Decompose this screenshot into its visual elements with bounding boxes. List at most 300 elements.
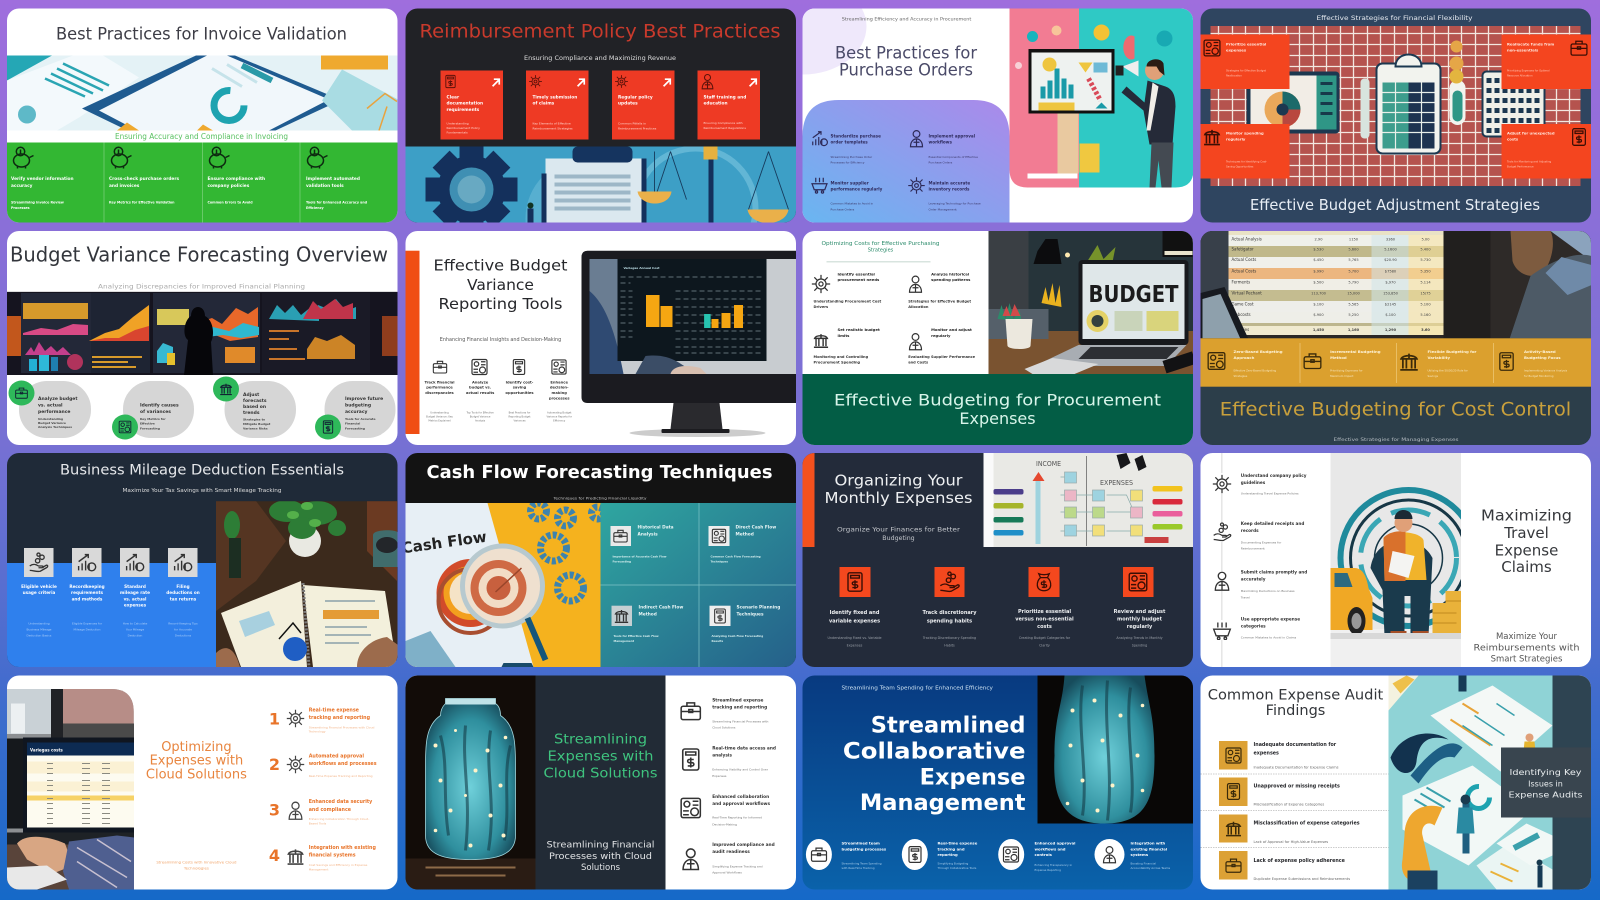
illustration: budget table and analyst: 1,450	[1313, 328, 1325, 332]
card: clear documentation: Reimbursement Policy	[446, 126, 480, 130]
bubble: improve future budgeting: Improve future	[345, 396, 383, 402]
step: identify fixed	[827, 567, 882, 647]
illustration: budget table and analyst: 5.160	[1420, 313, 1431, 317]
item: understand policy: Understand company policy	[1241, 473, 1307, 478]
step: review and adjust: regularly	[1127, 624, 1153, 630]
illustration: budget table and analyst: 15,000	[1347, 292, 1360, 296]
bubble: analyze budget: performance	[38, 409, 70, 415]
bubble: identify causes: Forecasting	[140, 426, 160, 430]
method: activity-based: for Budget Monitoring	[1524, 374, 1554, 378]
item: real-time data: analysis	[712, 753, 732, 759]
finding: inadequate documentation: expenses	[1254, 752, 1279, 756]
item: expense tracking: Real-time expense	[938, 840, 978, 846]
card: clear documentation	[440, 70, 503, 140]
step: review and adjust: monthly budget	[1117, 617, 1163, 623]
step: prioritize essential	[1015, 567, 1074, 647]
step 1: Technology	[308, 730, 326, 734]
item: implement tools: Implement automated	[306, 176, 360, 182]
box: prioritize essential expenses: Strategies for Effective Budget	[1226, 68, 1266, 72]
step 4: Integration with existing	[309, 845, 376, 851]
box: monitor spending: Saving Opportunities	[1226, 164, 1254, 168]
callout: Expense Audits	[1508, 790, 1582, 800]
card: regular policy updates: Common Pitfalls in	[618, 122, 646, 126]
illustration: jar photo	[1038, 676, 1193, 824]
item: understand policy	[1212, 473, 1307, 496]
illustration: budget table and analyst: 2.90	[1314, 238, 1323, 242]
item: approval workflows: controls	[1034, 852, 1053, 857]
step 2	[269, 754, 377, 778]
item: approval workflows: workflows and	[1034, 846, 1066, 852]
technique: direct: Common Cash Flow Forecasting	[710, 554, 761, 558]
item: analyze historical: Strategies for Effective Budget	[908, 300, 971, 304]
subtitle: Processes with Cloud	[549, 852, 652, 862]
title: Maximizing	[1481, 507, 1572, 525]
subtitle: Budgeting	[882, 535, 915, 542]
item: identify procurement needs	[812, 272, 882, 309]
item: real-time data: Enhancing Visibility and Control Over	[712, 768, 769, 772]
accent bar	[802, 453, 814, 547]
step 1	[269, 708, 375, 734]
item: filing deductions: for Accurate	[174, 627, 192, 631]
box: adjust for unexpected costs: costs	[1507, 136, 1519, 142]
title: Streamlined	[871, 712, 1026, 738]
item: maintain inventory: inventory records	[928, 186, 970, 192]
bubble: adjust forecasts: forecasts	[243, 398, 267, 404]
panel: Effective Budget Variance Reporting Tools	[406, 231, 796, 445]
item: recordkeeping: and methods	[72, 596, 103, 601]
item: standard mileage: How to Calculate	[123, 622, 147, 626]
title: Organizing Your	[834, 472, 963, 490]
illustration: traveller with car and gauge	[1330, 453, 1461, 667]
panel: Budget Variance Forecasting Overview	[7, 231, 398, 445]
title: Expense	[1495, 541, 1558, 559]
illustration: budget table and analyst: Webcosts	[1232, 312, 1251, 317]
item: collaboration: Decision-Making	[712, 822, 737, 826]
title: Best Practices for	[835, 44, 977, 62]
method: flexible	[1400, 349, 1476, 378]
box: adjust for unexpected costs: Adjust for unexpected	[1507, 130, 1555, 136]
method: incremental: Maximum Impact	[1330, 374, 1354, 378]
green title band: Effective Budgeting for Procurement	[834, 391, 1161, 410]
item: team budgeting: budgeting processes	[842, 846, 887, 852]
subtitle: Enhancing Financial Insights and Decision-Making	[440, 337, 561, 343]
subtitle: Maximize Your Tax Savings with Smart Mileage Tracking	[122, 488, 282, 494]
item: analyze budget	[466, 360, 495, 423]
item: maintain inventory: Maintain accurate	[928, 180, 970, 186]
item: team budgeting	[806, 839, 887, 870]
method: incremental: Method	[1330, 355, 1347, 360]
finding: inadequate documentation: Inadequate documentation for	[1254, 742, 1337, 748]
item: implement approval: Implement approval	[928, 134, 976, 138]
item: enhance decision-making	[546, 360, 573, 423]
step 3: Based Tools	[309, 822, 327, 826]
technique: indirect: Method	[638, 611, 657, 617]
illustration: budget table and analyst: $.990	[1313, 270, 1324, 274]
title: Optimizing	[161, 740, 232, 755]
step: review and adjust: Review and adjust	[1114, 609, 1166, 615]
step: prioritize essential: Clarity	[1039, 643, 1050, 647]
illustration: budget table and analyst: $20.90	[1384, 258, 1397, 262]
panel: Effective Budget Adjustment Strategies	[1200, 8, 1592, 222]
bubble: adjust forecasts	[213, 376, 296, 438]
step: review and adjust: Analyzing Trends in Monthly	[1116, 636, 1163, 640]
bubble: adjust forecasts: Strategies to	[243, 418, 265, 422]
box: monitor spending: regularly	[1226, 136, 1246, 142]
item: financial systems: systems	[1130, 852, 1149, 857]
item: standard mileage: vs. actual	[124, 596, 147, 601]
title: Management	[860, 790, 1026, 816]
method: zero-based	[1208, 349, 1283, 378]
illustration: budget table and analyst: 1150	[1349, 238, 1359, 242]
illustration: budget table and analyst: $2145	[1385, 302, 1396, 306]
bubble: improve future budgeting: Forecasting	[345, 426, 365, 430]
item: expense tracking	[681, 698, 769, 730]
step 3: 3	[269, 800, 280, 820]
item: appropriate categories: Use appropriate expense	[1241, 616, 1300, 621]
illustration: whiteboard income and expenses	[984, 453, 1193, 547]
box: prioritize essential expenses: Reallocation	[1226, 74, 1242, 78]
illustration: analyst viewing dashboards	[7, 292, 398, 375]
subtitle: Maximize Your	[1496, 632, 1558, 642]
item: track financial: Track financial	[424, 381, 455, 385]
item: enhance decision-making: Enhance	[550, 381, 568, 385]
bubble: identify causes: Key Metrics for	[140, 417, 166, 421]
item: cross-check: Key Metrics for Effective Validation	[109, 200, 175, 204]
step 1: 1	[269, 710, 280, 728]
title: Claims	[1501, 558, 1552, 576]
item: submit claims: accurately	[1241, 577, 1266, 582]
item: filing deductions: Record-Keeping Tips	[168, 622, 198, 626]
card: staff training: Staff training and	[704, 94, 746, 100]
title: Expense	[920, 764, 1026, 790]
box: adjust for unexpected costs: Budget Performance	[1507, 164, 1534, 168]
item: track financial: Metrics Explained	[428, 419, 451, 423]
item: recordkeeping: requirements	[71, 590, 103, 595]
technique: historical: Forecasting	[612, 559, 631, 563]
step: identify fixed: Identify fixed and	[830, 610, 880, 616]
item: real-time data: Real-time data access and	[712, 746, 776, 752]
item: expense tracking: Through Collaborative Tools	[936, 866, 977, 870]
top caption: Streamlining Team Spending for Enhanced Efficiency	[842, 685, 993, 691]
finding: inadequate documentation: Inadequate Documentation for Expense Claims	[1254, 766, 1339, 770]
item: standardize: Streamlining Purchase Order	[830, 155, 873, 159]
item: team budgeting: Streamlined team	[842, 840, 880, 846]
item: compliance	[683, 842, 775, 874]
illustration: budget table and analyst: 5,1600	[1384, 248, 1397, 252]
caption: Optimizing Costs for Effective Purchasing	[822, 241, 940, 247]
card: regular policy updates: Reimbursement Practices	[618, 126, 657, 130]
panel: Optimizing Expenses with Cloud Solutions	[7, 676, 398, 890]
illustration: audit documents	[1388, 676, 1552, 890]
item: monitor and adjust: Evaluating Supplier Performance	[908, 355, 976, 359]
item: compliance: Approval Workflows	[712, 870, 742, 874]
step: identify fixed: variable expenses	[829, 618, 880, 624]
item: ensure compliance: company policies	[208, 183, 250, 189]
method: flexible: Flexible Budgeting for	[1428, 349, 1476, 354]
item: monitor supplier: Monitor supplier	[830, 180, 869, 186]
item: enhance decision-making: processes	[549, 396, 570, 400]
method: activity-based: Implementing Variance Analysis	[1524, 369, 1568, 373]
step 1: Streamlining Financial Processes with Cloud	[309, 726, 375, 730]
title: Streamlining	[554, 732, 647, 748]
item: submit claims: Travel	[1240, 595, 1250, 599]
item: maintain inventory: Leveraging Technology for Purchase	[928, 202, 981, 206]
technique: scenario: Techniques	[736, 611, 764, 617]
illustration: budget table and analyst: 5,790	[1348, 280, 1359, 284]
technique: direct: Method	[736, 532, 754, 538]
finding: unapproved receipts: Misclassification of Expense Categories	[1254, 802, 1324, 806]
title: Cloud Solutions	[146, 768, 247, 782]
illustration: budget grid, clipboard and charts	[1210, 26, 1580, 186]
illustration: budget table and analyst: 5.350	[1420, 270, 1431, 274]
title: Monthly Expenses	[824, 489, 972, 507]
item: standardize: Processes for Efficiency	[830, 160, 865, 164]
title: Variance	[467, 276, 534, 294]
item: financial systems: Integration with	[1130, 840, 1166, 846]
top caption: Streamlining Efficiency and Accuracy in Procurement	[842, 16, 971, 22]
method: flexible: Savings	[1428, 374, 1439, 378]
item: standard mileage: Deduction	[128, 633, 143, 637]
technique: direct: Direct Cash Flow	[736, 525, 776, 531]
box: reallocate funds: Resource Allocation	[1507, 74, 1533, 78]
bubble: adjust forecasts: Adjust	[243, 392, 260, 398]
item: identify procurement needs: Understanding Procurement Cost	[814, 300, 882, 304]
item: recordkeeping	[69, 548, 105, 631]
illustration: budget table and analyst: 5.100	[1420, 302, 1431, 306]
item: keep receipts: records	[1241, 528, 1259, 533]
teal technique panels	[600, 503, 796, 667]
item: verify vendor: Processes	[11, 206, 30, 210]
green title band: Expenses	[959, 409, 1036, 428]
technique: direct	[708, 525, 776, 563]
step: track discretionary	[922, 567, 977, 647]
step 3: Enhanced data security	[309, 799, 373, 805]
bubble: identify causes: Identify causes	[140, 403, 179, 409]
item: monitor supplier	[812, 178, 883, 212]
step: track discretionary: spending habits	[927, 618, 972, 624]
item: identify cost-saving: Reporting Budget	[509, 415, 530, 419]
title: Best Practices for Invoice Validation	[56, 24, 347, 44]
method: zero-based: Strategies	[1234, 374, 1248, 378]
illustration: budget table and analyst: Totalities	[1230, 327, 1249, 332]
bubble: improve future budgeting: budgeting	[345, 403, 371, 409]
illustration: budget table and analyst: $7580	[1385, 270, 1397, 274]
box: monitor spending: Monitor spending	[1226, 130, 1264, 136]
technique: scenario	[710, 604, 780, 643]
illustration: budget table and analyst: $.100	[1385, 313, 1396, 317]
item: monitor and adjust: regularly	[931, 333, 951, 338]
bubble: analyze budget: vs. actual	[38, 403, 63, 409]
step 1: Real-time expense	[309, 708, 360, 714]
bubble: adjust forecasts: Variance Risks	[243, 426, 268, 430]
step 1: tracking and reporting	[309, 715, 371, 721]
callout: Issues in	[1528, 780, 1563, 788]
item: identify cost-saving	[505, 360, 534, 423]
illustration: budget table and analyst: 5,250	[1348, 313, 1359, 317]
illustration: tablet with invoice	[7, 56, 398, 130]
title: Cloud Solutions	[544, 766, 658, 782]
item: real-time data: Expenses	[712, 774, 727, 778]
finding: unapproved receipts: Unapproved or missing receipts	[1254, 784, 1340, 790]
step: track discretionary: Tracking Discretionary Spending	[922, 636, 976, 640]
step 2: Automated approval	[309, 754, 364, 760]
card: staff training	[698, 70, 760, 140]
item: recordkeeping: Mileage Deduction	[74, 627, 101, 631]
item: standard mileage	[120, 548, 150, 637]
item: implement tools: Tools for Enhanced Accuracy and	[306, 200, 368, 204]
step 2: workflows and processes	[309, 761, 377, 767]
right slate strip	[1552, 676, 1592, 890]
illustration: budget table and analyst: 5,765	[1348, 258, 1359, 262]
technique: indirect: Indirect Cash Flow	[638, 604, 683, 610]
item: set realistic limits: Procurement Spending	[814, 361, 861, 365]
method: flexible: Variability	[1428, 355, 1450, 360]
item: standardize	[813, 132, 881, 164]
callout: Identifying Key	[1510, 768, 1582, 777]
caption: Effective Strategies for Managing Expenses	[1334, 437, 1459, 443]
item: analyze historical	[908, 272, 971, 309]
item: keep receipts: Keep detailed receipts and	[1241, 521, 1304, 526]
illustration: desk with plant and notebook	[216, 501, 398, 667]
item: implement tools: validation tools	[306, 183, 344, 189]
gold band with methods	[1200, 338, 1592, 387]
item: submit claims: Maximizing Deductions on Business	[1241, 589, 1295, 593]
step 4: Management	[309, 868, 329, 872]
illustration: budget table and analyst: $,970	[1385, 280, 1396, 284]
item: eligible vehicle: Understanding	[28, 622, 50, 626]
illustration: glowing glass jar	[406, 676, 536, 890]
step: review and adjust	[1114, 567, 1166, 647]
panel: Streamlining Expenses with Cloud Solutions	[406, 676, 796, 890]
item: eligible vehicle	[21, 548, 57, 637]
finding: misclassification: Lack of Approval for High-Value Expenses	[1254, 840, 1328, 844]
item: standardize: order templates	[830, 140, 868, 144]
title: Expenses with	[150, 754, 243, 768]
item: filing deductions: Deductions	[175, 633, 192, 637]
finding: inadequate documentation	[1219, 741, 1339, 770]
box: prioritize essential expenses: expenses	[1226, 48, 1247, 52]
item: expense tracking	[902, 839, 978, 870]
subtitle: Smart Strategies	[1491, 655, 1563, 665]
item: implement tools	[306, 147, 368, 210]
item: track financial: discrepancies	[425, 391, 455, 395]
item: collaboration: and approval workflows	[712, 801, 771, 807]
item: analyze budget: Analysis	[475, 419, 486, 423]
illustration: budget table and analyst: 113,700	[1311, 292, 1327, 296]
item: standardize: Standardize purchase	[830, 134, 881, 138]
technique: historical: Historical Data	[638, 525, 674, 531]
illustration: budget table and analyst: 3360	[1386, 238, 1396, 242]
card: regular policy updates: Regular policy	[618, 94, 653, 100]
item: verify vendor: accuracy	[11, 183, 33, 189]
item: implement approval	[910, 131, 978, 164]
item: expense tracking: tracking and reporting	[712, 705, 767, 711]
bubble: identify causes	[112, 381, 194, 440]
step: track discretionary: Track discretionary	[922, 610, 977, 616]
panel: Best Practices for Invoice Validation	[7, 8, 398, 222]
item: compliance: Simplifying Expense Tracking and	[712, 864, 763, 868]
item: implement approval: Purchase Orders	[928, 160, 953, 164]
item: set realistic limits: limits	[838, 333, 850, 338]
card: clear documentation: Understanding	[446, 122, 469, 126]
item: collaboration	[681, 794, 771, 826]
item: recordkeeping: Recordkeeping	[69, 584, 105, 589]
illustration: person at spreadsheet monitor: Variegas costs	[30, 748, 63, 752]
method: activity-based: Activity-Based	[1524, 349, 1556, 354]
step: prioritize essential: costs	[1037, 624, 1052, 630]
illustration: budget table and analyst: $.530	[1313, 248, 1324, 252]
method: zero-based: Effective Zero-Based Budgeting	[1234, 369, 1276, 373]
bubble: analyze budget: Budget Variance	[38, 421, 66, 425]
item: analyze budget: Top Tools for Effective	[467, 411, 494, 415]
method: incremental: Incremental Budgeting	[1330, 349, 1381, 354]
item: approval workflows: Expense Reporting	[1034, 868, 1061, 872]
technique: scenario: Scenario Planning	[736, 604, 780, 610]
illustration: presenter with chart	[1010, 8, 1194, 188]
illustration: cash flow target and gears: Cash Flow	[401, 528, 488, 557]
item: expense tracking: Simplifying Budgeting	[938, 862, 969, 866]
item: financial systems	[1094, 839, 1171, 870]
finding: unapproved receipts	[1219, 778, 1340, 806]
card: regular policy updates: updates	[618, 100, 638, 106]
box: reallocate funds: Reallocate funds from	[1507, 42, 1554, 46]
illustration: budget table and analyst: 5,565	[1348, 302, 1359, 306]
item: team budgeting: Streamlining Team Spending	[842, 862, 882, 866]
subtitle: Technologies	[183, 866, 209, 870]
box: reallocate funds: non-essentials	[1507, 48, 1539, 52]
item: enhance decision-making: Variance Reports for	[546, 415, 573, 419]
item: identify procurement needs: Drivers	[814, 305, 828, 309]
item: implement approval: Essential Components of Effective	[928, 155, 978, 159]
bubble: improve future budgeting	[315, 381, 396, 440]
item: standard mileage: Standard	[124, 584, 146, 589]
finding: policy adherence: Lack of expense policy adherence	[1254, 858, 1346, 864]
card: staff training: Reimbursement Regulations	[704, 126, 746, 130]
item: ensure compliance: Common Errors to Avoid	[208, 200, 253, 204]
panel: Effective Budgeting for Procurement Expenses	[802, 231, 1196, 445]
card: timely submission: Key Elements of Effective	[532, 122, 571, 126]
subtitle: Techniques for Predicting Financial Liquidity	[552, 497, 646, 501]
green panel	[7, 142, 398, 222]
card: clear documentation: Fundamentals	[446, 130, 468, 134]
item: analyze budget: budget vs.	[469, 386, 492, 390]
item: expense tracking: reporting	[938, 852, 958, 857]
title: Business Mileage Deduction Essentials	[60, 463, 344, 479]
item: eligible vehicle: usage criteria	[23, 590, 56, 595]
box: prioritize essential expenses: Prioritize essential	[1226, 42, 1266, 46]
item: team budgeting: with Real-Time Tracking	[842, 866, 875, 870]
subtitle: Streamlining Costs with Innovative Cloud	[156, 860, 237, 864]
item: monitor supplier: performance regularly	[830, 186, 883, 192]
item: analyze budget: actual results	[466, 391, 495, 395]
finding: policy adherence	[1219, 851, 1350, 881]
item: ensure compliance: Ensure compliance with	[208, 176, 265, 182]
method: zero-based: Approach	[1234, 355, 1255, 360]
panel: Common Expense Audit Findings	[1200, 676, 1592, 890]
gradient panel	[802, 100, 1010, 222]
subtitle: Ensuring Accuracy and Compliance in Invoicing	[115, 132, 288, 141]
card: staff training: Ensuring Compliance with	[704, 121, 743, 125]
illustration: whiteboard income and expenses: INCOME	[1036, 460, 1061, 468]
card: staff training: education	[704, 100, 728, 106]
title: Purchase Orders	[839, 60, 973, 80]
title: Travel	[1503, 524, 1549, 542]
technique: historical: Analysis	[638, 532, 658, 538]
step: review and adjust: Spending	[1132, 643, 1147, 647]
item: enhance decision-making: Automating Budget	[547, 411, 571, 415]
item: keep receipts	[1212, 521, 1304, 551]
method: zero-based: Zero-Based Budgeting	[1234, 349, 1283, 354]
